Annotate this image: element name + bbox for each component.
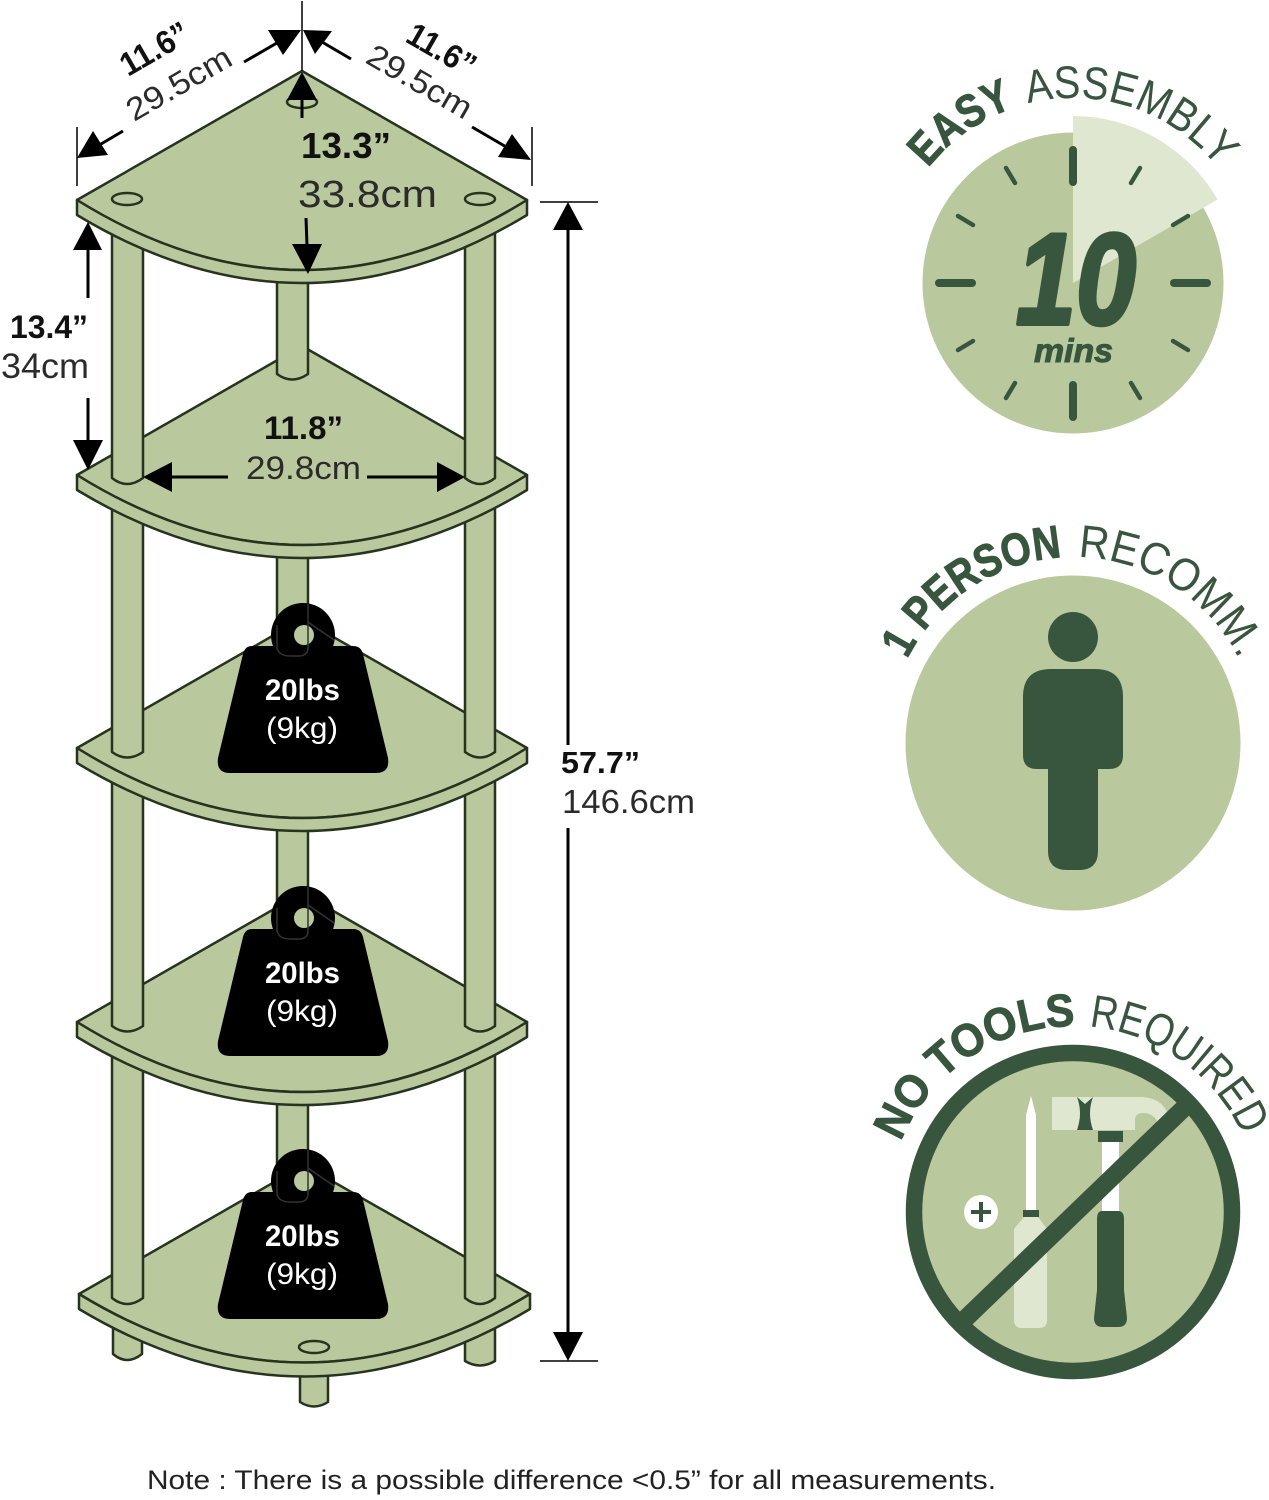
shelf 5 (bottom) [79,1040,530,1376]
feet [113,1315,495,1406]
badge: one person recommended [884,525,1258,910]
dimension: shelf depth 13.3 in: 33.8cm [298,174,437,216]
badge: easy assembly [906,66,1241,434]
prohibition circle fill [906,1045,1240,1379]
dimension: top right edge 11.6 in [303,15,532,186]
shelf 3 [77,500,527,831]
dimension: top left edge 11.6 in [77,1,302,186]
dimension: shelf spacing 13.4 in: 34cm [1,347,89,386]
person circle [906,576,1240,910]
dimension: inner width 11.8 in [143,410,465,492]
weight icon: shelf 4: 20lbs [265,957,340,990]
note: Note : There is a possible difference <0.5” for all measurements. [147,1465,996,1495]
shelf 1 (top) [77,71,527,283]
heading: easy assembly: EASYASSEMBLY [906,66,1241,166]
weight icon: shelf 3: (9kg) [266,712,338,745]
dimension: top right edge 11.6 in: 11.6” [400,15,483,84]
dimension: total height 57.7 in: 57.7” [561,745,640,780]
label: 10: 10 [1016,206,1136,352]
icon: hammer [1052,1097,1170,1327]
dimension: shelf spacing 13.4 in: 13.4” [10,309,88,345]
label: mins: mins [1034,332,1113,369]
dimension: inner width 11.8 in: 11.8” [264,410,343,446]
icon: screwdriver [1014,1096,1047,1328]
dimension: shelf depth 13.3 in: 13.3” [301,125,391,166]
dimension: top left edge 11.6 in: 11.6” [113,14,196,83]
badge: no tools required [872,994,1266,1380]
dimension: top left edge 11.6 in: 29.5cm [120,39,238,128]
clock face [922,132,1224,434]
shelf 4 [77,770,527,1105]
icon: screw head [964,1195,998,1229]
dimension: total height 57.7 in [540,202,695,1361]
weight icon: shelf 5: 20lbs [265,1220,340,1253]
shelf 2 [77,225,527,558]
weight icon: shelf 4: (9kg) [266,995,338,1028]
weight icon: shelf 5 [218,1149,388,1319]
dimension: inner width 11.8 in: 29.8cm [246,450,361,486]
person icon [1023,612,1123,870]
dimension: shelf spacing 13.4 in [1,222,103,470]
weight icon: shelf 3: 20lbs [265,674,340,707]
clock ticks [939,150,1207,417]
weight icon: shelf 5: (9kg) [266,1258,338,1291]
shelf unit illustration [77,71,530,1406]
heading: 1 person recomm.: 1 PERSONRECOMM. [884,525,1258,658]
dimension: total height 57.7 in: 146.6cm [562,783,695,820]
weight icon: shelf 3 [218,603,388,773]
prohibition ring and slash [914,1053,1232,1371]
ten minute wedge [1073,116,1218,283]
dimension: top right edge 11.6 in: 29.5cm [360,37,479,126]
dimension: shelf depth 13.3 in [287,72,437,274]
weight icon: shelf 4 [218,886,388,1056]
